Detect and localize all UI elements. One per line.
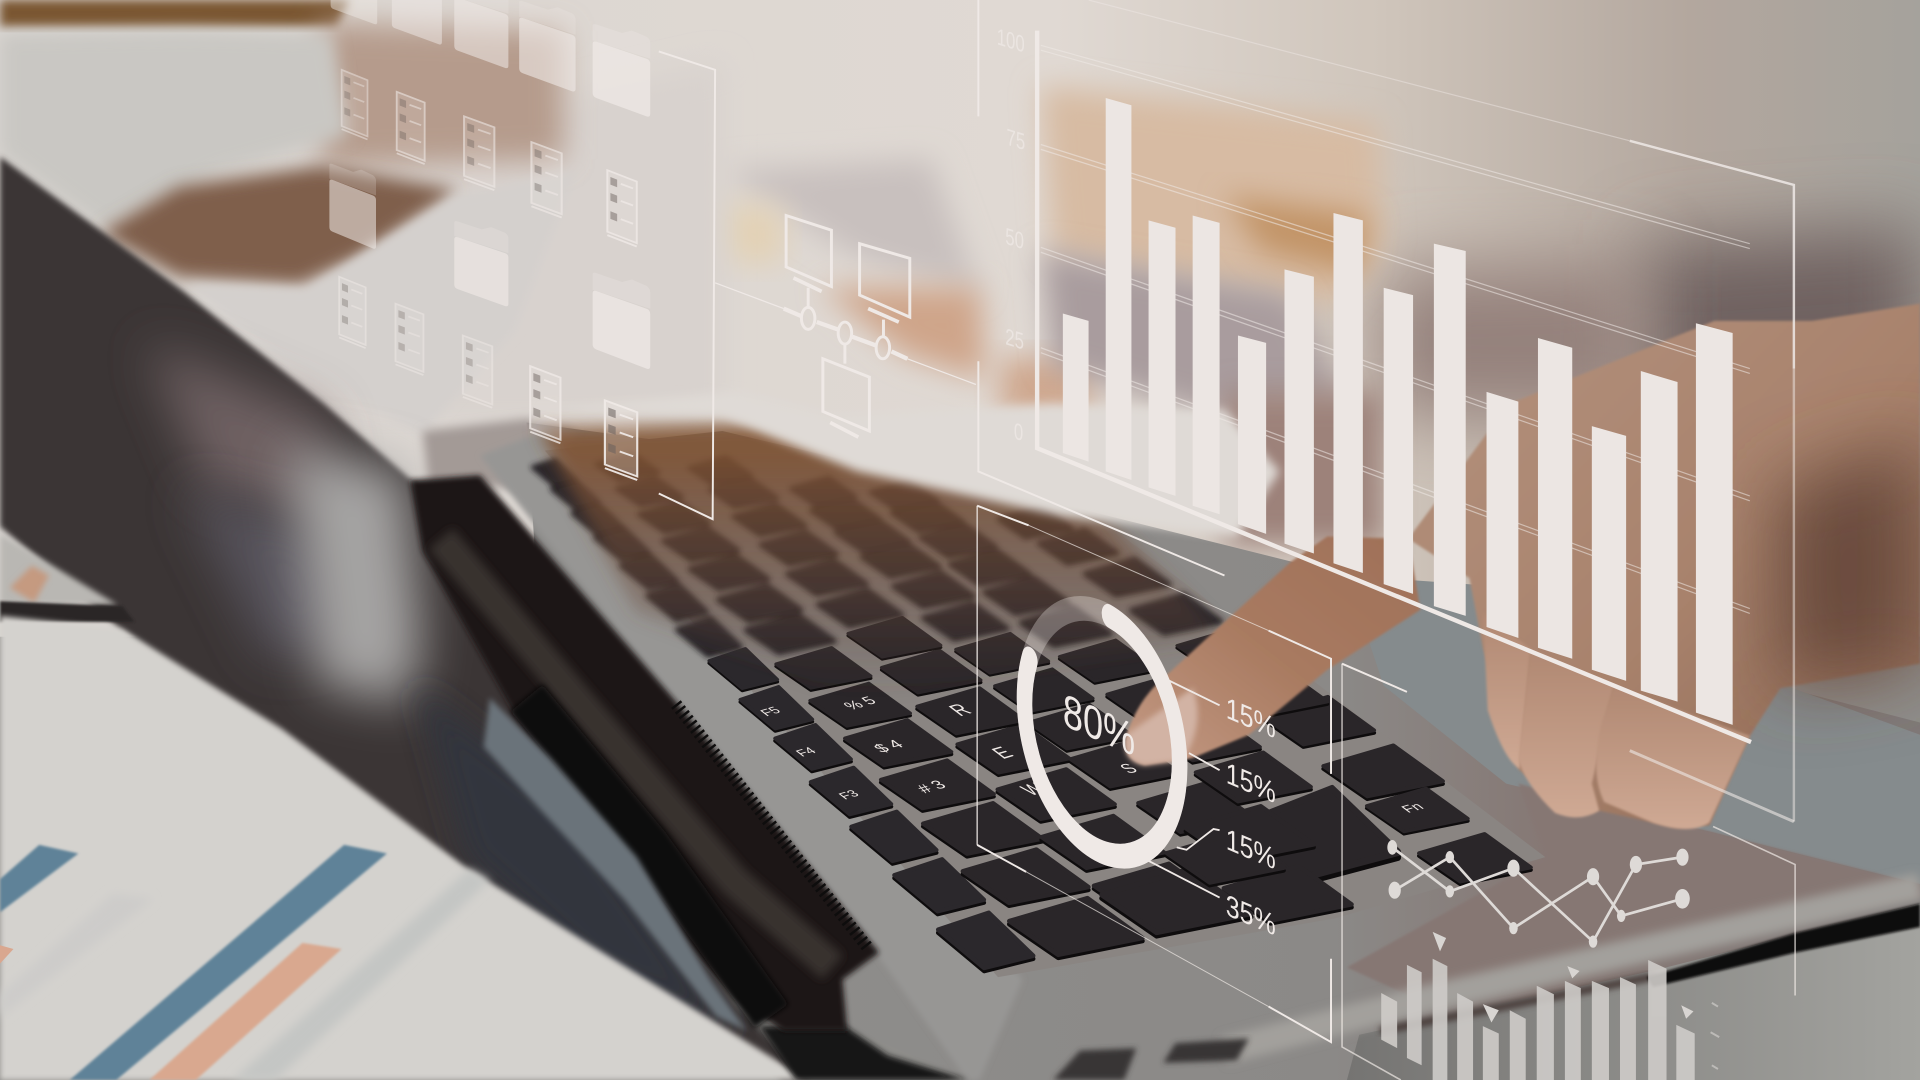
bars <box>1063 98 1733 725</box>
y axis labels: 0 <box>1014 418 1023 447</box>
panel frame <box>977 506 1331 1042</box>
middle row of folders <box>329 164 650 369</box>
y axis labels: 25 <box>1005 324 1024 355</box>
percentage labels: 15% <box>1226 822 1276 877</box>
y axis labels: 50 <box>1005 223 1024 255</box>
percentage labels: 15% <box>1226 756 1276 811</box>
percentage labels: 15% <box>1226 691 1276 746</box>
first row of checklists <box>342 70 637 247</box>
warm out-of-focus haze on far keys <box>539 422 1224 698</box>
key legends: F5 <box>757 705 784 718</box>
key legends: F4 <box>792 745 820 759</box>
top row of folders <box>331 0 650 117</box>
key legends: # 3 <box>912 777 951 796</box>
second row of checklists <box>339 277 637 480</box>
key legends: $ 4 <box>869 737 908 755</box>
panel frame <box>978 0 1794 822</box>
percentage labels <box>1226 691 1276 943</box>
near keys, in focus <box>709 618 1531 971</box>
grid lines <box>1041 45 1750 613</box>
HUD: network of three computers <box>715 216 976 437</box>
laptop hinge <box>410 475 879 1031</box>
y axis labels: 100 <box>997 24 1025 58</box>
key legends: Fn <box>1399 801 1428 815</box>
HUD: donut chart panel <box>977 506 1331 1042</box>
panel frame <box>1342 664 1795 1080</box>
donut value arc <box>1004 607 1204 873</box>
y axis labels: 75 <box>1007 124 1025 156</box>
key legends: W <box>1016 780 1051 799</box>
key legends: S <box>1115 760 1142 777</box>
hand with fingers on the trackpad <box>1125 304 1920 829</box>
small triangle markers <box>1433 932 1693 1022</box>
tablet edge in foreground left <box>0 157 808 1080</box>
key legends: % 5 <box>841 695 881 713</box>
key legends <box>757 695 1428 815</box>
far keys, out of focus <box>532 452 1221 656</box>
key legends: F3 <box>835 788 862 801</box>
HUD: main bar chart panel <box>978 0 1794 822</box>
keyboard with keys <box>532 422 1545 977</box>
leader lines <box>1144 678 1220 898</box>
laptop body <box>422 419 1920 1080</box>
faint trailing dashes <box>1711 1003 1719 1069</box>
paper with printed bar chart <box>0 616 808 1080</box>
HUD: folders and checklists panel <box>329 0 715 519</box>
HUD: lower right panel with line and mini bar charts <box>1342 664 1795 1080</box>
blurred white sheet edge over the keyboard <box>539 392 1280 536</box>
percentage labels: 35% <box>1226 888 1276 943</box>
key legends: R <box>944 701 977 720</box>
mini bars <box>1381 959 1695 1080</box>
axes <box>1037 31 1751 742</box>
line chart <box>1387 840 1690 948</box>
donut value label: 80% <box>1063 684 1135 767</box>
pointing finger <box>1125 536 1420 765</box>
key legends: E <box>987 744 1019 763</box>
donut track <box>1000 592 1204 873</box>
y axis labels <box>997 24 1025 447</box>
